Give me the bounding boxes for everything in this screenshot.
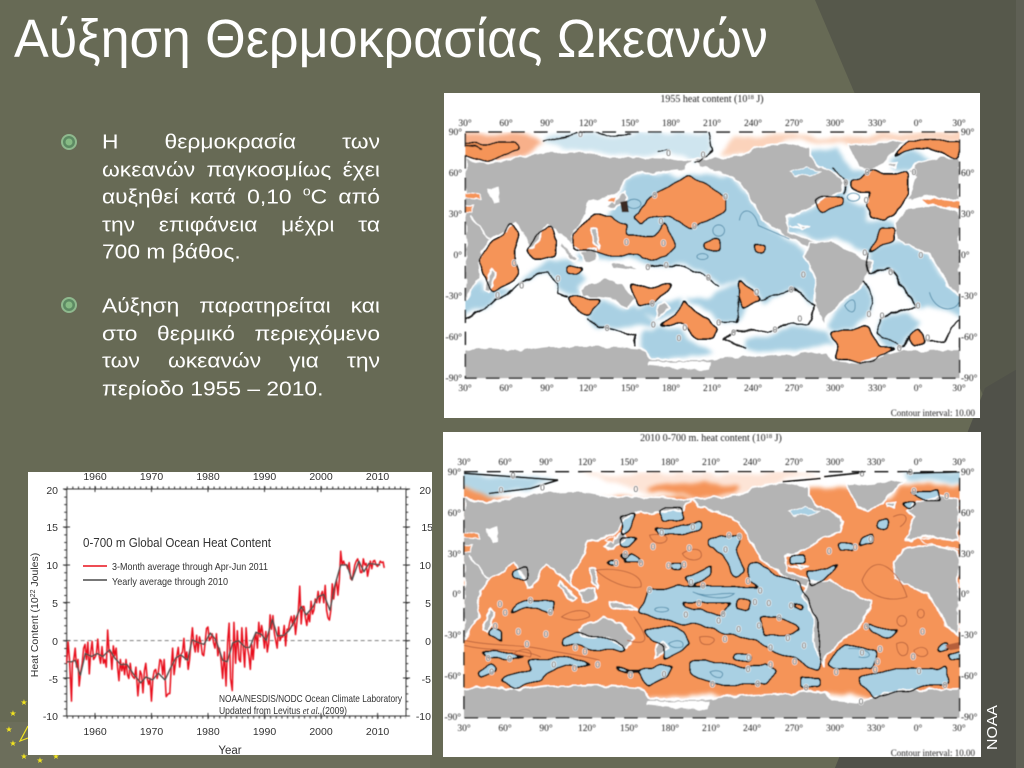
zero labels: 0 xyxy=(789,602,794,611)
zero labels: 0 xyxy=(912,168,917,177)
axis labels 2010: 30° xyxy=(457,723,471,734)
y axis label: 22 xyxy=(30,589,37,597)
EU flag stars logo: ★ xyxy=(20,752,28,761)
axis labels 1955: 120° xyxy=(579,383,597,394)
chart credit: Updated from Levitus et al. (2009) xyxy=(219,705,347,717)
axis labels 2010: 180° xyxy=(661,457,679,468)
zero labels: 0 xyxy=(737,533,742,541)
axis labels 1955: 30° xyxy=(952,383,966,394)
text block: second bullet xyxy=(102,293,380,400)
heat map: 2010 0-700 m heat content: 0° xyxy=(452,589,461,600)
zero labels: 0 xyxy=(918,251,924,260)
zero labels: 0 xyxy=(710,680,715,689)
source label NOAA: NOAA xyxy=(984,705,1001,750)
zero labels: 0 xyxy=(746,653,752,662)
heat map: 1955 heat content: -30° xyxy=(961,291,978,302)
text block: first bullet: 700 m βάθος. xyxy=(102,239,241,263)
zero labels: 0 xyxy=(684,611,689,620)
axis labels 2010: 270° xyxy=(785,457,803,468)
zero labels: 0 xyxy=(692,222,697,231)
zero labels: 0 xyxy=(916,301,921,310)
axis labels 1955: 270° xyxy=(785,383,803,394)
zero labels: 0 xyxy=(690,523,696,532)
zero labels xyxy=(486,468,949,706)
EU flag stars logo: ★ xyxy=(5,725,13,734)
heat map: 2010 0-700 m heat content: 30° xyxy=(448,549,461,560)
axis tick labels: 2000 xyxy=(309,726,333,738)
axis labels 2010: 150° xyxy=(620,723,638,734)
heat map: 1955 heat content: 0° xyxy=(453,250,462,261)
axis labels 1955: 210° xyxy=(703,383,721,394)
zero labels: 0 xyxy=(516,627,521,636)
zero labels: 0 xyxy=(873,666,878,675)
zero labels: 0 xyxy=(875,657,880,666)
heat map: 1955 heat content: -60° xyxy=(446,332,462,343)
axis labels 1955: 180° xyxy=(662,383,680,394)
axis labels 2010: 30° xyxy=(952,457,966,468)
heat map: 2010 0-700 m heat content: 30° xyxy=(961,549,974,560)
zero labels: 0 xyxy=(864,196,869,205)
heat map: 1955 heat content: 0° xyxy=(961,250,970,261)
zero labels: 0 xyxy=(548,608,553,617)
zero labels: 0 xyxy=(512,259,517,268)
line chart: global ocean heat content: 20 xyxy=(419,485,431,497)
axis labels 1955: 300° xyxy=(826,383,844,394)
zero labels: 0 xyxy=(716,319,721,328)
axis labels 1955: 120° xyxy=(579,118,597,129)
axis labels 1955: 240° xyxy=(744,383,762,394)
heat map: 1955 heat content: 60° xyxy=(961,168,974,179)
zero labels: 0 xyxy=(666,149,671,158)
zero labels: 0 xyxy=(556,275,561,284)
zero labels: 0 xyxy=(731,329,736,338)
heat map: 1955 heat content: -90° xyxy=(961,373,978,384)
zero labels: 0 xyxy=(498,600,503,609)
zero labels: 0 xyxy=(659,529,664,537)
map plot area 1955 xyxy=(458,130,966,382)
zero labels: 0 xyxy=(493,622,498,631)
zero contour lines xyxy=(464,472,959,493)
chart heading: 0-700 m Global Ocean Heat Content xyxy=(83,535,271,550)
zero labels: 0 xyxy=(912,487,917,496)
zero labels: 0 xyxy=(757,622,762,631)
line chart: global ocean heat content: 5 xyxy=(52,598,58,610)
zero labels: 0 xyxy=(486,654,491,663)
zero labels: 0 xyxy=(633,485,639,494)
zero labels: 0 xyxy=(525,640,530,649)
zero labels: 0 xyxy=(682,561,687,569)
zero labels: 0 xyxy=(777,613,782,622)
axis labels 2010: 30° xyxy=(457,457,471,468)
zero labels: 0 xyxy=(662,670,667,679)
zero labels: 0 xyxy=(746,665,751,674)
chart frame xyxy=(67,489,406,716)
axis labels 1955: 300° xyxy=(826,118,844,129)
axis tick labels: 1960 xyxy=(83,726,107,738)
zero labels: 0 xyxy=(785,634,791,643)
zero labels: 0 xyxy=(503,609,508,618)
zero labels: 0 xyxy=(677,334,682,343)
zero labels: 0 xyxy=(860,649,865,658)
zero labels: 0 xyxy=(755,679,760,688)
heat map: 2010 0-700 m heat content: J) xyxy=(772,433,782,444)
EU flag stars logo: ★ xyxy=(9,709,17,718)
axis labels 2010: 60° xyxy=(498,723,512,734)
zero labels: 0 xyxy=(723,193,728,201)
chart legend xyxy=(83,561,268,588)
zero labels: 0 xyxy=(867,310,872,319)
axis labels 2010: 0° xyxy=(914,457,922,468)
brown contours xyxy=(464,515,959,660)
zero labels: 0 xyxy=(944,492,949,501)
bullet icon 2 xyxy=(61,297,77,313)
zero labels: 0 xyxy=(716,617,721,626)
line chart: global ocean heat content: 0 xyxy=(52,636,58,648)
zero labels: 0 xyxy=(614,559,619,568)
axis labels 2010: 330° xyxy=(867,723,885,734)
zero labels: 0 xyxy=(736,625,741,634)
y axis label: Joules) xyxy=(29,553,41,590)
zero contour lines xyxy=(458,133,959,349)
line chart: global ocean heat content: -5 xyxy=(49,674,58,686)
zero labels: 0 xyxy=(801,270,806,279)
zero labels: 0 xyxy=(664,261,669,270)
zero labels: 0 xyxy=(943,681,948,690)
axis tick labels xyxy=(83,471,389,757)
axis labels 1955: 30° xyxy=(458,383,472,394)
zero labels: 0 xyxy=(583,647,588,656)
axis labels 1955: 210° xyxy=(703,118,721,129)
zero labels: 0 xyxy=(925,334,930,343)
line chart: global ocean heat content: 5 xyxy=(425,598,431,610)
zero labels: 0 xyxy=(573,643,578,652)
axis labels 2010: 240° xyxy=(743,723,761,734)
text block: first bullet: ωκεανών παγκοσμίως έχει xyxy=(102,157,380,180)
zero labels: 0 xyxy=(499,486,504,495)
zero labels: 0 xyxy=(639,559,644,568)
heat map: 1955 heat content: 90° xyxy=(449,127,462,138)
zero labels: 0 xyxy=(511,472,516,480)
heat map: 2010 0-700 m heat content: -90° xyxy=(961,712,978,723)
plot frame xyxy=(465,132,959,378)
zero labels: 0 xyxy=(605,324,610,333)
heat map: 1955 heat content: -90° xyxy=(446,373,462,384)
plot frame xyxy=(464,472,959,718)
zero labels: 0 xyxy=(859,698,864,706)
zero labels: 0 xyxy=(908,468,913,477)
zero labels: 0 xyxy=(804,683,809,692)
text block: first bullet: αυξηθεί κατά 0,10 οC από xyxy=(102,184,380,208)
zero labels: 0 xyxy=(661,239,666,248)
axis labels 2010: 270° xyxy=(785,723,803,734)
axis labels 1955 xyxy=(458,118,966,394)
heat map: 2010 0-700 m heat content: 0° xyxy=(961,589,970,600)
zero labels: 0 xyxy=(727,532,732,540)
zero labels: 0 xyxy=(746,577,751,586)
zero labels: 0 xyxy=(758,587,763,596)
zero labels: 0 xyxy=(595,661,601,670)
title: Αύξηση Θερμοκρασίας Ωκεανών xyxy=(14,9,768,69)
zero labels: 0 xyxy=(789,285,794,294)
zero labels xyxy=(495,130,930,353)
zero labels: 0 xyxy=(528,597,533,606)
line chart: global ocean heat content: 10 xyxy=(419,560,431,572)
zero labels: 0 xyxy=(647,586,652,595)
bullet icon 1 xyxy=(61,134,77,150)
zero labels: 0 xyxy=(753,598,758,607)
zero labels: 0 xyxy=(540,484,545,493)
zero labels: 0 xyxy=(687,544,692,553)
axis labels 2010: 120° xyxy=(578,457,596,468)
zero labels: 0 xyxy=(827,547,832,556)
axis tick labels: 1980 xyxy=(196,726,220,738)
zero labels: 0 xyxy=(624,238,629,247)
axis labels 2010: 90° xyxy=(539,723,553,734)
axis labels 1955: 90° xyxy=(540,383,554,394)
line chart: global ocean heat content xyxy=(28,471,433,757)
text block: second bullet: των ωκεανών για την xyxy=(102,348,380,372)
axis labels 1955: 60° xyxy=(499,383,513,394)
zero labels: 0 xyxy=(723,546,728,554)
yearly average series xyxy=(67,561,380,683)
axis labels 1955: 90° xyxy=(540,118,554,129)
axis labels 1955: 330° xyxy=(868,383,886,394)
line chart: global ocean heat content: -10 xyxy=(416,711,431,723)
zero labels: 0 xyxy=(860,470,865,479)
axis labels 2010: 300° xyxy=(826,723,844,734)
axis labels 1955: 60° xyxy=(499,118,513,129)
text block: second bullet: Αύξηση παρατηρείται και xyxy=(102,293,380,317)
axis labels 1955: 0° xyxy=(914,383,922,394)
zero labels: 0 xyxy=(864,622,869,631)
zero labels: 0 xyxy=(578,130,583,139)
zero labels: 0 xyxy=(888,268,894,277)
heat map: 2010 0-700 m heat content: -30° xyxy=(445,630,461,641)
zero labels: 0 xyxy=(650,299,655,308)
zero labels: 0 xyxy=(552,661,557,670)
zero labels: 0 xyxy=(768,643,773,652)
heat map: 2010 0-700 m heat content: -30° xyxy=(961,630,978,641)
line chart: global ocean heat content: -10 xyxy=(43,711,58,723)
line chart: global ocean heat content: 0 xyxy=(425,636,431,648)
text block: first bullet xyxy=(102,129,380,263)
heat map: 2010 0-700 m heat content: 60° xyxy=(448,508,461,519)
zero labels: 0 xyxy=(646,263,651,272)
axis labels 2010: 240° xyxy=(743,457,761,468)
axis labels 1955: 240° xyxy=(744,118,762,129)
zero labels: 0 xyxy=(723,635,728,644)
chart credit xyxy=(220,694,402,716)
axis labels 2010: 210° xyxy=(702,723,720,734)
zero labels: 0 xyxy=(834,668,839,677)
zero labels: 0 xyxy=(706,274,711,283)
zero labels: 0 xyxy=(766,599,772,608)
zero labels: 0 xyxy=(489,667,494,676)
zero labels: 0 xyxy=(495,291,500,300)
axis tick labels: 2010 xyxy=(366,726,389,738)
red 3-month series xyxy=(67,551,384,701)
map plot area 2010 xyxy=(456,468,966,722)
axis labels 1955: 330° xyxy=(868,118,886,129)
heat map: 1955 heat content: 90° xyxy=(961,127,974,138)
zero labels: 0 xyxy=(868,535,873,544)
heat map: 2010 0-700 m heat content: 60° xyxy=(961,508,974,519)
axis labels 1955: 30° xyxy=(952,118,966,129)
zero labels: 0 xyxy=(507,654,512,663)
text block: first bullet: την επιφάνεια μέχρι τα xyxy=(102,212,380,235)
heat map: 2010 0-700 m heat content: 90° xyxy=(448,467,461,478)
axis tick labels: Year xyxy=(218,745,242,757)
heat map: 2010 0-700 m heat content: 90° xyxy=(961,467,974,478)
axis labels 1955: 150° xyxy=(621,118,639,129)
axis tick labels: 1980 xyxy=(196,471,220,483)
zero labels: 0 xyxy=(697,599,702,608)
zero labels: 0 xyxy=(721,610,726,619)
heat map: 1955 heat content: 18 xyxy=(747,94,754,101)
EU flag stars logo xyxy=(5,698,60,765)
chart legend: Yearly average through 2010 xyxy=(112,576,228,588)
line chart: global ocean heat content: 15 xyxy=(421,522,433,534)
zero labels: 0 xyxy=(572,664,577,673)
axis labels 1955: 270° xyxy=(785,118,803,129)
text block: first bullet: Η θερμοκρασία των xyxy=(102,129,380,153)
zero labels: 0 xyxy=(863,249,868,258)
axis labels 1955: 30° xyxy=(458,118,472,129)
axis tick labels: 1970 xyxy=(140,726,163,738)
heat map: 1955 heat content: -60° xyxy=(961,332,978,343)
heat map: 1955 heat content: 30° xyxy=(449,209,462,220)
zero labels: 0 xyxy=(792,657,797,666)
zero labels: 0 xyxy=(701,151,706,159)
zero labels: 0 xyxy=(878,645,883,654)
line chart: global ocean heat content: 10 xyxy=(46,560,58,572)
zero labels: 0 xyxy=(666,562,671,570)
heat map: 2010 0-700 m heat content: -60° xyxy=(961,671,978,682)
axis labels 1955: 150° xyxy=(621,383,639,394)
axis tick labels: 2000 xyxy=(309,471,333,483)
heat map: 1955 heat content: Contour interval: 10.00 xyxy=(891,408,975,418)
heat map: 2010 0-700 m heat content: -90° xyxy=(445,712,461,723)
heat map: 2010 0-700 m heat content: Contour interval: 10.00 xyxy=(891,748,975,758)
zero labels: 0 xyxy=(798,315,803,324)
text block: second bullet: περίοδο 1955 – 2010. xyxy=(102,376,323,399)
axis labels 2010: 150° xyxy=(620,457,638,468)
axis labels 1955: 0° xyxy=(914,118,922,129)
zero labels: 0 xyxy=(651,320,656,329)
zero labels: 0 xyxy=(689,578,694,587)
heat map: 1955 heat content: -30° xyxy=(446,291,462,302)
EU flag stars logo: ★ xyxy=(9,739,17,748)
heat map: 1955 heat content: 60° xyxy=(449,168,462,179)
axis labels 2010: 90° xyxy=(539,457,553,468)
zero labels: 0 xyxy=(544,630,549,639)
heat map: 2010 0-700 m heat content xyxy=(443,432,981,758)
inner thin contours xyxy=(627,193,959,312)
axis labels 2010: 180° xyxy=(661,723,679,734)
line chart: global ocean heat content: -5 xyxy=(422,674,431,686)
zero labels: 0 xyxy=(920,627,925,636)
heat map: 2010 0-700 m heat content: -60° xyxy=(445,671,461,682)
zero labels: 0 xyxy=(701,582,706,591)
zero labels: 0 xyxy=(651,543,656,551)
zero labels: 0 xyxy=(683,324,688,333)
zero labels: 0 xyxy=(519,281,525,290)
axis labels 2010: 60° xyxy=(498,457,512,468)
zero labels: 0 xyxy=(917,667,922,676)
heat map: 1955 heat content: J) xyxy=(754,94,764,105)
y axis label: Heat Content (10 xyxy=(29,597,41,677)
axis labels 2010: 210° xyxy=(702,457,720,468)
zero labels: 0 xyxy=(865,168,870,177)
zero labels: 0 xyxy=(853,543,858,552)
axis labels 1955: 180° xyxy=(662,118,680,129)
EU flag stars logo: ★ xyxy=(20,698,28,707)
zero labels: 0 xyxy=(768,661,773,670)
axis labels 2010: 300° xyxy=(826,457,844,468)
zero labels: 0 xyxy=(652,191,658,200)
zero labels: 0 xyxy=(623,550,628,559)
zero labels: 0 xyxy=(659,217,664,226)
axis labels 2010: 120° xyxy=(578,723,596,734)
heat map: 1955 heat content: 1955 heat content (10 xyxy=(660,94,747,105)
zero labels: 0 xyxy=(844,179,849,187)
zero labels: 0 xyxy=(911,653,916,662)
chart legend: 3-Month average through Apr-Jun 2011 xyxy=(112,561,268,573)
heat map: 2010 0-700 m heat content: 18 xyxy=(766,433,772,440)
heat map: 1955 heat content xyxy=(444,93,980,418)
axis tick labels: 1990 xyxy=(253,726,276,738)
zero labels: 0 xyxy=(880,311,885,320)
zero labels: 0 xyxy=(628,671,633,680)
zero labels: 0 xyxy=(802,642,807,651)
chart credit: NOAA/NESDIS/NODC Ocean Climate Laboratory xyxy=(219,693,403,705)
zero labels: 0 xyxy=(897,344,902,353)
zero labels: 0 xyxy=(754,288,759,297)
axis tick labels: 1970 xyxy=(140,471,163,483)
line chart: global ocean heat content: 20 xyxy=(46,485,58,497)
heat map: 2010 0-700 m heat content: 2010 0-700 m. heat content (10 xyxy=(640,433,766,444)
axis labels 2010 xyxy=(457,457,966,734)
text block: second bullet: στο θερμικό περιεχόμενο xyxy=(102,321,380,344)
zero labels: 0 xyxy=(773,325,778,334)
axis tick labels: 2010 xyxy=(366,471,389,483)
axis tick labels: 1990 xyxy=(253,471,276,483)
axis labels 2010: 330° xyxy=(867,457,885,468)
axis labels 2010: 30° xyxy=(952,723,966,734)
axis tick labels: 1960 xyxy=(83,471,107,483)
axis labels 2010: 0° xyxy=(914,723,922,734)
heat map: 1955 heat content: 30° xyxy=(961,209,974,220)
EU flag stars logo: ★ xyxy=(52,752,60,761)
EU flag stars logo: ★ xyxy=(36,756,44,765)
line chart: global ocean heat content: 15 xyxy=(46,522,58,534)
